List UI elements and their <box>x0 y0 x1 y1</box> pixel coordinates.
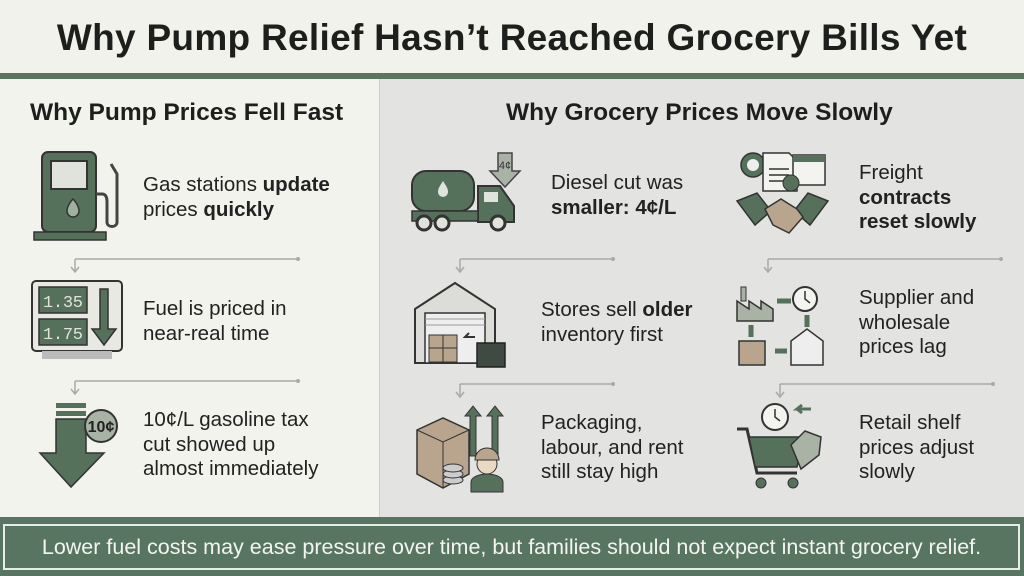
header rule <box>0 73 1024 79</box>
text: freight contracts: reset slowly <box>859 210 976 233</box>
text: tax cut: almost immediately <box>143 457 318 480</box>
text: tax cut <box>143 408 318 480</box>
text: freight contracts <box>859 161 976 233</box>
text: older inventory: inventory first <box>541 322 663 346</box>
text: diesel cut: smaller: 4¢/L <box>551 196 676 218</box>
icon: packaging labour rent <box>416 405 504 492</box>
icon: supplier cycle <box>736 286 824 366</box>
text: packaging: labour, and rent <box>541 436 683 458</box>
text: retail shelf: prices adjust <box>859 436 974 458</box>
title: Why Pump Relief Hasn’t Reached Grocery Bills Yet <box>57 17 967 58</box>
text: near-real time: Fuel is priced in <box>143 297 287 320</box>
text: tax cut: 10¢/L gasoline tax <box>143 408 309 431</box>
text: supplier lag: wholesale <box>859 310 950 334</box>
icon: price board <box>31 280 123 359</box>
text: retail shelf <box>859 411 974 483</box>
text: older inventory <box>541 298 693 346</box>
icon: price board: 1.75 <box>43 326 83 345</box>
text: packaging: Packaging, <box>541 411 642 434</box>
panel: pump prices <box>0 79 379 517</box>
text: packaging: still stay high <box>541 460 658 483</box>
text: older inventory: Stores sell older <box>541 298 693 321</box>
text: update quickly: prices quickly <box>143 198 274 220</box>
text: supplier lag: Supplier and <box>859 286 974 309</box>
heading: pump prices: Why Pump Prices Fell Fast <box>30 99 343 126</box>
panel: grocery prices <box>379 79 1024 517</box>
footer text <box>3 524 1020 570</box>
text: near-real time: near-real time <box>143 322 269 344</box>
icon: diesel truck: 4¢ <box>499 160 511 172</box>
arrow connector: col1 row1 <box>456 257 615 273</box>
icon: shopping cart tag <box>737 403 822 488</box>
heading: grocery prices: Why Grocery Prices Move Slowly <box>506 99 893 126</box>
text: near-real time <box>143 297 287 344</box>
text: diesel cut: Diesel cut was <box>551 171 683 194</box>
arrow connector 2 <box>70 379 300 395</box>
footer text: Lower fuel costs may ease pressure over time, but families should not expect instant grocery relief. <box>42 535 981 559</box>
text: freight contracts: contracts <box>859 186 951 208</box>
text: freight contracts: Freight <box>859 161 923 184</box>
icon: diesel truck <box>411 152 522 232</box>
text: update quickly: Gas stations update <box>143 173 330 196</box>
icon: gas pump <box>33 151 118 241</box>
text: retail shelf: Retail shelf <box>859 411 960 434</box>
icon: tax cut arrow: 10¢ <box>88 419 114 436</box>
icon: tax cut arrow <box>38 403 118 488</box>
arrow connector 1 <box>70 257 300 273</box>
footer banner <box>0 517 1024 576</box>
text: diesel cut <box>551 171 683 218</box>
text: supplier lag: prices lag <box>859 335 947 358</box>
text: supplier lag <box>859 286 974 358</box>
text: retail shelf: slowly <box>859 460 915 483</box>
text: tax cut: cut showed up <box>143 432 275 456</box>
icon: price board: 1.35 <box>43 294 83 313</box>
arrow connector: col1 row2 <box>456 382 615 398</box>
arrow connector: col2 row1 <box>764 257 1003 273</box>
text: packaging <box>541 411 684 483</box>
icon: freight handshake <box>736 152 830 234</box>
text: update quickly <box>143 173 330 220</box>
arrow connector: col2 row2 <box>776 382 995 398</box>
icon: warehouse <box>414 282 506 368</box>
